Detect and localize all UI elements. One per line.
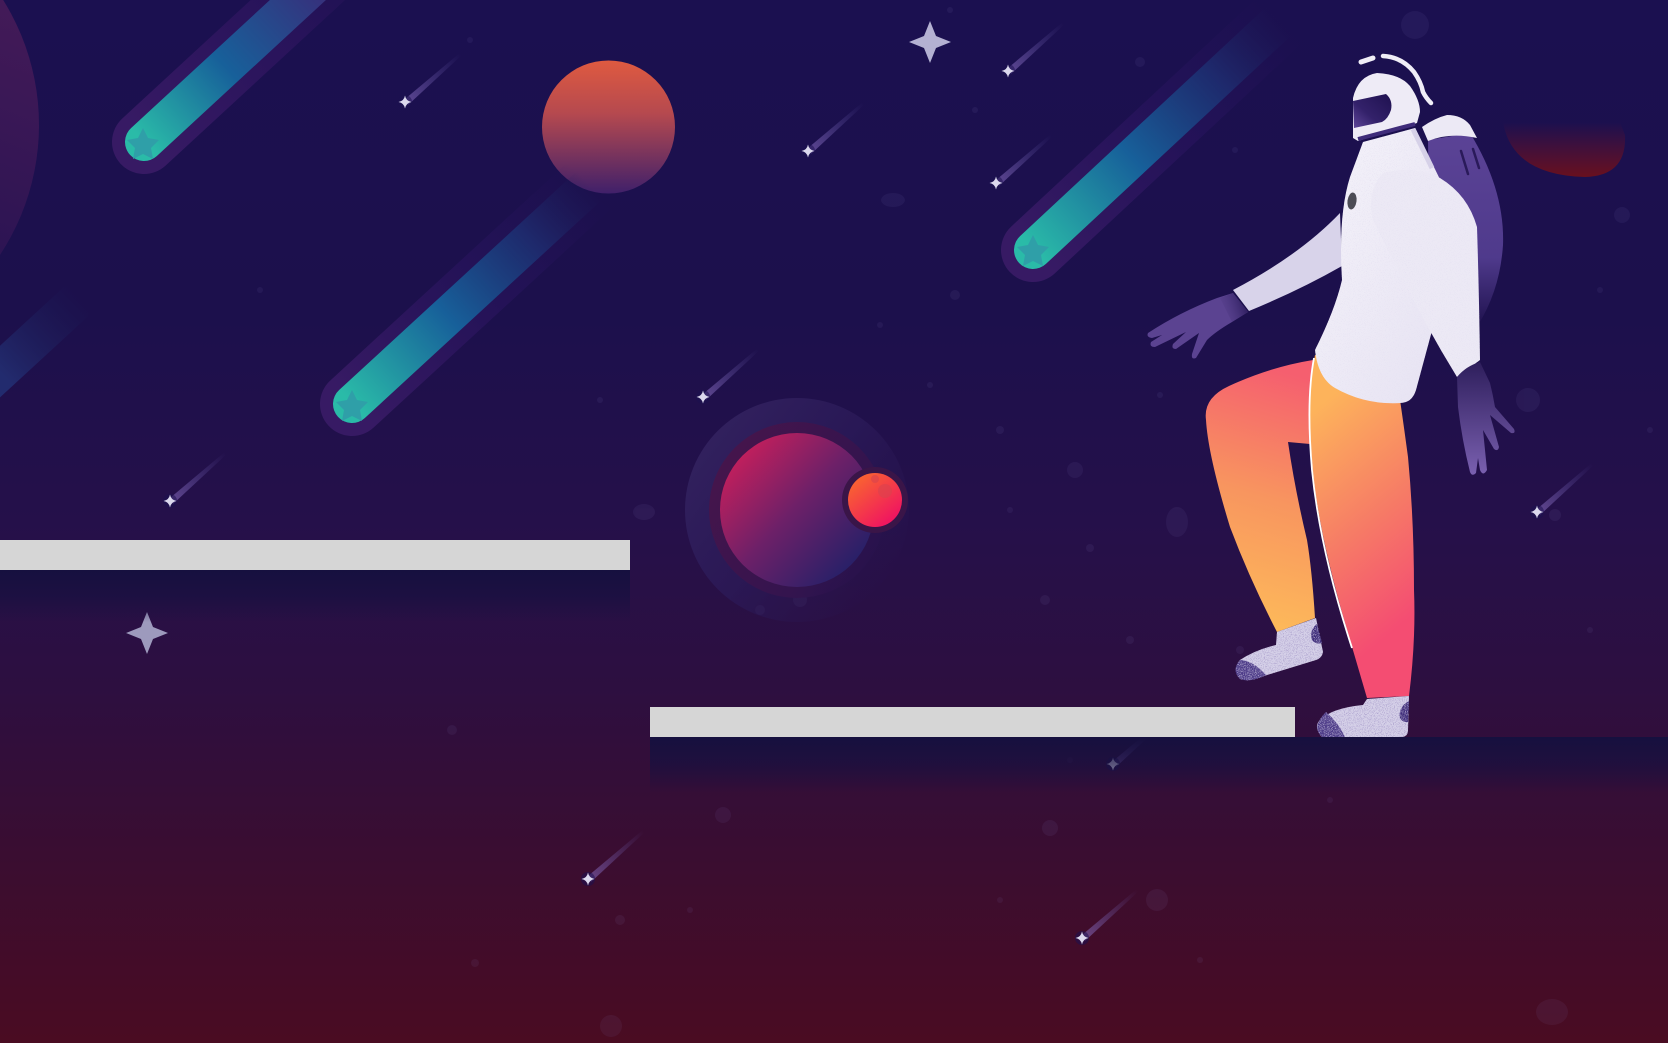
near arm — [1371, 170, 1480, 377]
large sparkle: left — [126, 612, 168, 654]
front leg — [1310, 355, 1414, 698]
large sparkle: top — [909, 21, 951, 63]
moon — [842, 467, 908, 533]
planet: orange — [542, 60, 675, 194]
far glove — [1148, 293, 1248, 358]
far arm — [1233, 213, 1342, 311]
planet: left edge — [0, 0, 39, 361]
near glove — [1457, 362, 1515, 475]
back shoe — [1236, 618, 1323, 680]
shadow under upper platform — [0, 570, 630, 622]
planet: dark red — [1503, 122, 1625, 177]
comet star — [1017, 235, 1049, 266]
comet: top left — [127, 0, 325, 159]
shooting stars — [163, 21, 1595, 945]
front shoe — [1317, 696, 1409, 737]
comet star — [336, 390, 368, 421]
back leg — [1206, 360, 1315, 632]
comet star — [127, 128, 159, 159]
astronaut — [1148, 56, 1515, 737]
backpack — [1422, 115, 1503, 325]
planet group with moon — [685, 398, 909, 622]
comet: right — [1017, 20, 1280, 266]
shadow under lower platform — [650, 737, 1668, 793]
antenna dash — [1361, 58, 1373, 62]
lower platform — [650, 707, 1295, 737]
spine seam — [1413, 129, 1432, 168]
leg highlight — [1309, 358, 1352, 648]
comet: faint left edge — [0, 298, 80, 390]
chest button — [1346, 192, 1358, 210]
antenna — [1383, 56, 1431, 103]
upper platform — [0, 540, 630, 570]
helmet — [1353, 73, 1420, 141]
torso — [1315, 128, 1450, 403]
comet: middle — [336, 185, 590, 421]
